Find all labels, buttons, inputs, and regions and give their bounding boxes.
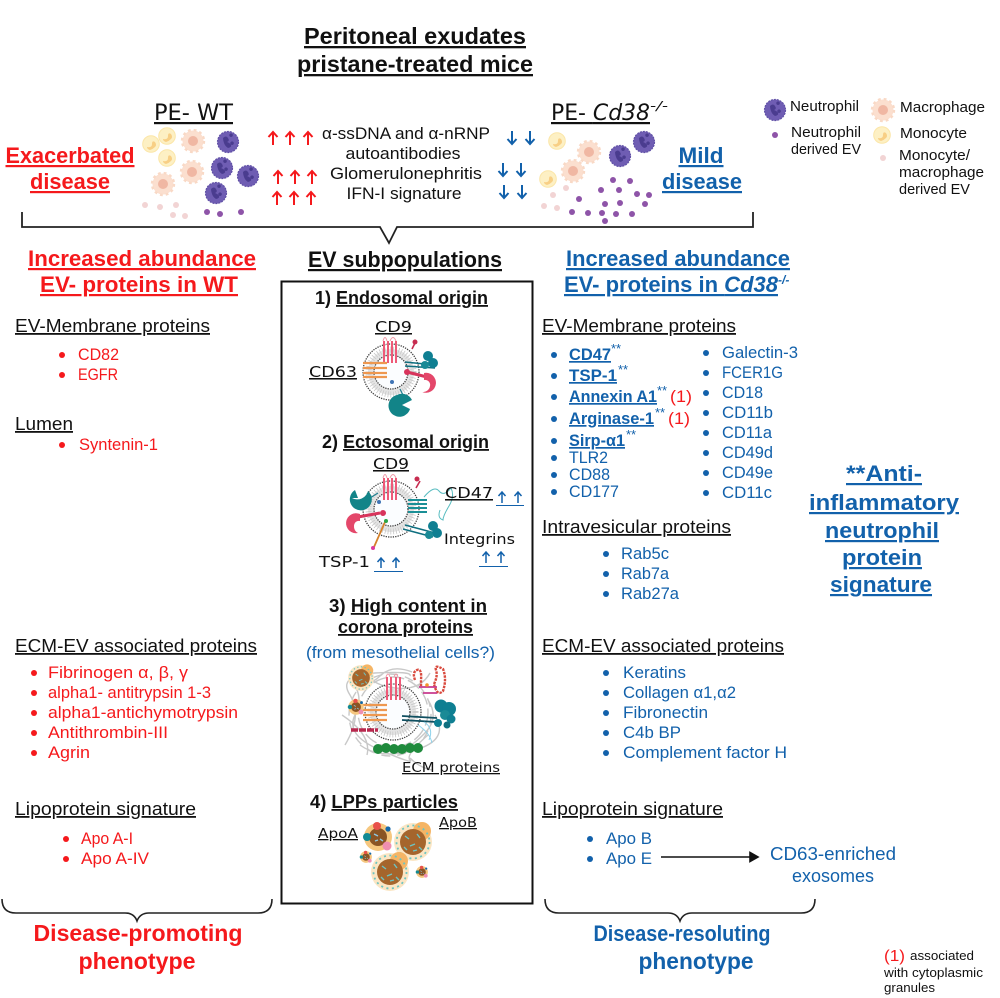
right: ECM-EV associated proteins: ECM-EV associated proteins (542, 636, 784, 656)
label: TSP-1 with arrows (318, 553, 403, 572)
right: lipoprotein signature (542, 799, 723, 868)
arrow: Apo E to exosomes (661, 852, 758, 862)
legend: Monocyte (900, 126, 967, 142)
anti-inflammatory signature callout: protein (842, 545, 922, 570)
footnote: granules (884, 981, 935, 995)
label: CD47 with arrows: CD47 (445, 484, 493, 502)
right: ECM-EV associated proteins (542, 636, 787, 762)
right: EV-membrane proteins: Sirp-α1 (569, 431, 625, 450)
right: lipoprotein signature: Apo B (606, 830, 652, 848)
note: from mesothelial cells: (from mesothelial cells?) (306, 643, 495, 662)
footnote (883, 948, 983, 995)
label: integrins with arrows (444, 532, 515, 566)
cell cluster: Cd38 knockout (540, 132, 654, 224)
central comparison text: Glomerulonephritis (330, 164, 482, 183)
right: EV-membrane proteins: CD11a (722, 424, 773, 442)
CD63-enriched exosomes (770, 844, 896, 886)
subpopulation 3 heading: corona proteins (338, 617, 473, 637)
left: EV-membrane proteins (15, 316, 210, 384)
label: mild disease (662, 143, 742, 194)
right: EV-membrane proteins: CD88 (569, 466, 610, 484)
heading: increased abundance Cd38: Increased abundance (566, 246, 790, 271)
disease-promoting phenotype: phenotype (78, 948, 196, 974)
heading: increased abundance WT (28, 246, 256, 297)
legend: Monocyte/ (899, 148, 971, 164)
right: EV-membrane proteins: (1) (668, 410, 690, 428)
legend: derived EV (791, 142, 861, 158)
right: EV-membrane proteins: CD11c (722, 484, 772, 502)
right: EV-membrane proteins: FCER1G (722, 364, 783, 382)
footnote: (1) (884, 948, 905, 965)
central comparison text: autoantibodies (346, 144, 460, 163)
panel: EV subpopulations (282, 282, 532, 904)
label: exacerbated disease: Exacerbated (6, 143, 134, 168)
label: exacerbated disease: disease (30, 169, 110, 194)
vesicle 3: corona (342, 664, 456, 770)
subpopulation 2 heading: 2) Ectosomal origin (322, 432, 489, 452)
label: PE- WT: PE- WT (154, 101, 234, 126)
anti-inflammatory signature callout: signature (830, 572, 932, 597)
label: ApoA: ApoA (318, 827, 358, 842)
label: CD47 with arrows (445, 484, 524, 506)
legend: Neutrophil (791, 125, 861, 141)
left: lipoprotein signature: Lipoprotein signature (15, 799, 196, 819)
right: EV-membrane proteins: CD47 (569, 345, 611, 364)
right: ECM-EV associated proteins: Complement factor H (623, 744, 787, 762)
right: EV-membrane proteins: CD177 (569, 483, 619, 501)
left brace (2, 899, 272, 921)
right brace (545, 899, 815, 921)
left: ECM-EV associated proteins (15, 636, 257, 762)
right: EV-membrane proteins: Arginase-1 (569, 409, 654, 428)
right: EV-membrane proteins (542, 316, 798, 502)
legend (764, 99, 985, 198)
subpopulation 4 heading: 4) LPPs particles (310, 792, 458, 812)
heading: increased abundance Cd38 (564, 246, 790, 297)
left: ECM-EV associated proteins: alpha1- antitrypsin 1-3 (48, 684, 211, 702)
right: intravesicular proteins (542, 517, 731, 603)
title: Peritoneal exudates (304, 23, 526, 49)
right: EV-membrane proteins: EV-Membrane proteins (542, 316, 736, 336)
anti-inflammatory signature callout: inflammatory (809, 490, 960, 515)
left: lipoprotein signature: Apo A-IV (81, 850, 149, 868)
heading: increased abundance WT: EV- proteins in WT (40, 272, 239, 297)
anti-inflammatory signature callout: neutrophil (825, 518, 939, 543)
label: exacerbated disease (6, 143, 134, 194)
left: EV-membrane proteins: CD82 (78, 346, 119, 364)
vesicle 2: ectosomal (346, 474, 453, 550)
right: intravesicular proteins: Rab5c (621, 545, 669, 563)
right: EV-membrane proteins: TSP-1 (569, 366, 617, 385)
label: TSP-1 with arrows: TSP-1 (318, 553, 370, 571)
anti-inflammatory signature callout: **Anti- (846, 461, 922, 486)
label: CD9 (1): CD9 (375, 318, 412, 336)
right: EV-membrane proteins: CD11b (722, 404, 773, 422)
subpopulation 3 heading: 3) High content in (329, 596, 487, 616)
right: EV-membrane proteins: ** (657, 383, 667, 398)
right: EV-membrane proteins: (1) (670, 388, 692, 406)
cell cluster: WT (142, 128, 258, 219)
right: lipoprotein signature: Apo E (606, 850, 652, 868)
right: EV-membrane proteins: Galectin-3 (722, 344, 798, 362)
label: ApoB: ApoB (439, 816, 477, 831)
heading: EV subpopulations: EV subpopulations (308, 247, 502, 272)
CD63-enriched exosomes: CD63-enriched (770, 844, 896, 864)
right: ECM-EV associated proteins: Fibronectin (623, 704, 708, 722)
heading: increased abundance Cd38: -/- (778, 273, 789, 287)
right: lipoprotein signature: Lipoprotein signature (542, 799, 723, 819)
label: CD63: CD63 (309, 363, 357, 381)
left: lumen (15, 414, 158, 454)
disease-resoluting phenotype (594, 921, 770, 974)
anti-inflammatory signature callout (809, 461, 960, 597)
heading: increased abundance WT: Increased abundance (28, 246, 256, 271)
right: ECM-EV associated proteins: C4b BP (623, 724, 681, 742)
right: intravesicular proteins: Rab7a (621, 565, 670, 583)
left: ECM-EV associated proteins: Agrin (48, 744, 90, 762)
right: EV-membrane proteins: TLR2 (569, 449, 608, 467)
central comparison text: α-ssDNA and α-nRNP (322, 124, 490, 143)
label: PE- Cd38 knockout: PE- Cd38 (551, 101, 650, 126)
CD63-enriched exosomes: exosomes (792, 866, 874, 886)
right: intravesicular proteins: Rab27a (621, 585, 680, 603)
right: intravesicular proteins: Intravesicular proteins (542, 517, 731, 537)
label: PE- Cd38 knockout: -/- (650, 99, 668, 113)
subpopulation 1 heading: 1) Endosomal origin (315, 288, 488, 308)
red up arrows (268, 132, 316, 205)
vesicle 1: endosomal (363, 338, 438, 417)
disease-resoluting phenotype: Disease-resoluting (594, 921, 770, 946)
left: ECM-EV associated proteins: Fibrinogen α, β, γ (48, 664, 189, 682)
left: lipoprotein signature (15, 799, 196, 868)
disease-promoting phenotype: Disease-promoting (34, 920, 242, 946)
right: EV-membrane proteins: CD49e (722, 464, 773, 482)
left: lumen: Lumen (15, 414, 73, 434)
title: pristane-treated mice (297, 51, 533, 77)
right: EV-membrane proteins: Annexin A1 (569, 387, 657, 406)
title (297, 23, 533, 77)
left: ECM-EV associated proteins: alpha1-antichymotrypsin (48, 704, 238, 722)
left: EV-membrane proteins: EGFR (78, 366, 118, 384)
right: EV-membrane proteins: ** (626, 427, 636, 442)
legend: derived EV (899, 182, 970, 198)
footnote: associated (910, 949, 974, 963)
right: ECM-EV associated proteins: Collagen α1,α2 (623, 684, 736, 702)
label: mild disease: Mild (678, 143, 724, 168)
bracket (22, 212, 753, 243)
legend: Macrophage (900, 100, 985, 116)
label: mild disease: disease (662, 169, 742, 194)
legend: macrophage (899, 165, 984, 181)
left: lipoprotein signature: Apo A-I (81, 830, 133, 848)
label: integrins with arrows: Integrins (444, 532, 515, 548)
right: EV-membrane proteins: CD49d (722, 444, 773, 462)
central comparison text (322, 124, 490, 203)
right: EV-membrane proteins: ** (618, 362, 628, 377)
footnote: with cytoplasmic (883, 966, 983, 980)
label: ECM proteins: ECM proteins (402, 761, 500, 776)
blue down arrows (498, 131, 534, 198)
disease-promoting phenotype (34, 920, 242, 974)
left: ECM-EV associated proteins: ECM-EV associated proteins (15, 636, 257, 656)
right: EV-membrane proteins: ** (611, 341, 621, 356)
central comparison text: IFN-I signature (346, 184, 462, 203)
left: lumen: Syntenin-1 (79, 436, 158, 454)
heading: increased abundance Cd38: EV- proteins in Cd38 (564, 272, 779, 297)
label: CD9 (2): CD9 (373, 455, 409, 473)
legend: Neutrophil (790, 99, 859, 115)
left: EV-membrane proteins: EV-Membrane proteins (15, 316, 210, 336)
right: EV-membrane proteins: ** (655, 405, 665, 420)
left: ECM-EV associated proteins: Antithrombin-III (48, 724, 168, 742)
subpopulation 3 heading (329, 596, 487, 637)
right: ECM-EV associated proteins: Keratins (623, 664, 686, 682)
right: EV-membrane proteins: CD18 (722, 384, 763, 402)
lipoprotein particles (360, 822, 432, 891)
disease-resoluting phenotype: phenotype (638, 948, 754, 974)
